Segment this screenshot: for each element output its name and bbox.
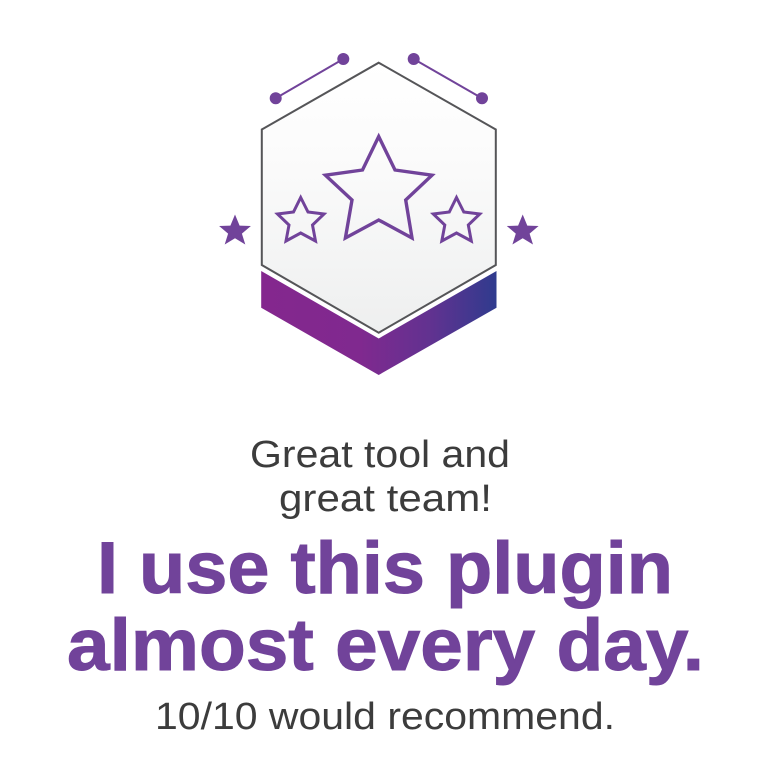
icon: solid star right (507, 214, 539, 244)
icon: large outlined star (325, 136, 432, 238)
icon: solid star left (219, 214, 251, 244)
connector line: top right (408, 53, 488, 104)
connector line: top left (270, 53, 349, 104)
badge illustration (219, 53, 539, 375)
intro text line 2: great team! (279, 478, 492, 520)
closing text: 10/10 would recommend. (155, 696, 615, 738)
hexagon badge (262, 63, 496, 333)
icon: small outlined star left (278, 198, 324, 241)
headline line 1: I use this plugin (97, 528, 673, 609)
badge ribbon band (261, 271, 496, 375)
headline line 2: almost every day. (67, 605, 704, 686)
intro text line 1: Great tool and (250, 434, 510, 476)
icon: small outlined star right (433, 198, 480, 241)
